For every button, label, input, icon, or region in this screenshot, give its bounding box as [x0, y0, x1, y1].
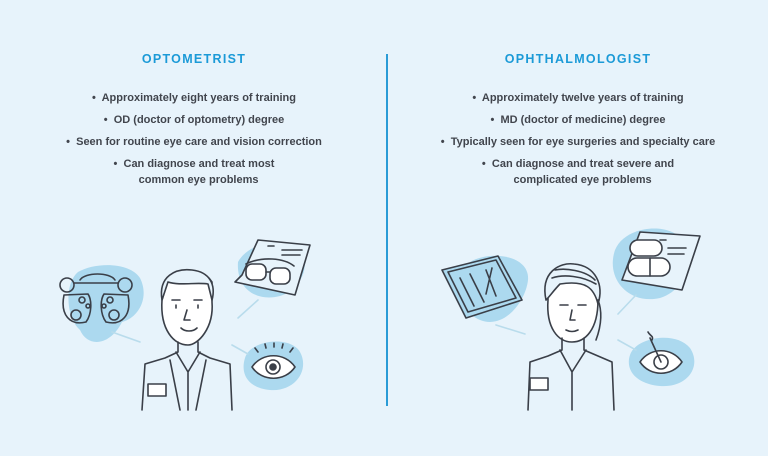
bullet list: optometrist: • Seen for routine eye care and vision correction: [66, 136, 322, 148]
panel: ophthalmologist: [441, 52, 715, 186]
bullet list: ophthalmologist: • Approximately twelve years of training: [472, 92, 684, 104]
illustration: ophthalmologist: [442, 229, 700, 410]
icon: surgical tray: [442, 256, 528, 334]
bullet list: ophthalmologist: • Typically seen for eye surgeries and specialty care: [441, 136, 715, 148]
icon: eye: [232, 342, 303, 390]
icon: pills prescription: [613, 229, 700, 314]
bullet list: optometrist: common eye problems: [139, 174, 258, 186]
bullet list: ophthalmologist: • Can diagnose and treat severe and: [482, 158, 674, 170]
bullet list: optometrist: • OD (doctor of optometry) degree: [104, 114, 284, 126]
bullet list: ophthalmologist: [441, 92, 715, 186]
divider: [386, 54, 388, 406]
heading: ophthalmologist: OPHTHALMOLOGIST: [505, 52, 651, 66]
bullet list: optometrist: • Approximately eight years of training: [92, 92, 296, 104]
illustration: optometrist: [60, 240, 310, 410]
icon: glasses prescription: [235, 240, 310, 318]
bullet list: ophthalmologist: complicated eye problems: [513, 174, 652, 186]
bullet list: optometrist: • Can diagnose and treat most: [114, 158, 274, 170]
figure: male optometrist: [142, 270, 232, 410]
heading: optometrist: OPTOMETRIST: [142, 52, 246, 66]
bullet list: ophthalmologist: • MD (doctor of medicine) degree: [490, 114, 665, 126]
icon: eye surgery: [618, 332, 694, 386]
icon: phoropter: [60, 265, 144, 342]
bullet list: optometrist: [66, 92, 322, 186]
figure: female ophthalmologist: [528, 264, 614, 410]
panel: optometrist: [66, 52, 322, 186]
